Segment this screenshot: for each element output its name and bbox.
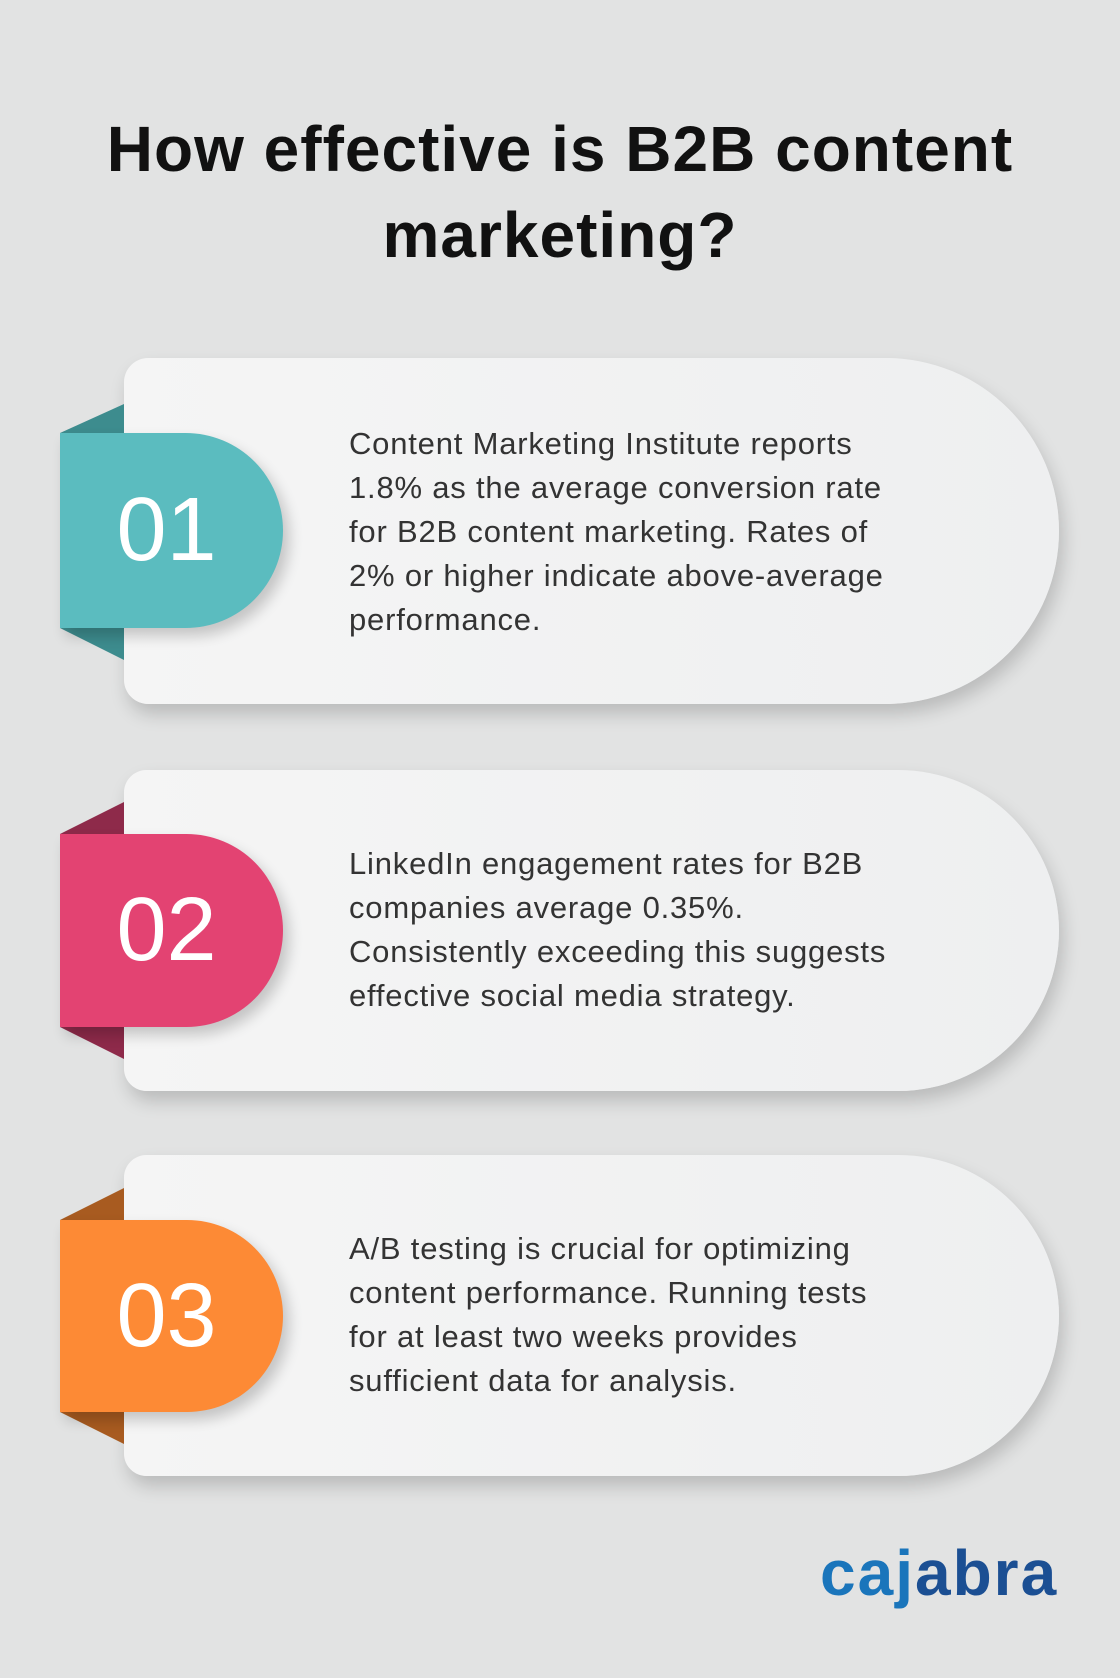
text 01: 1.8% as the average conversion rate	[349, 470, 882, 505]
text 02	[349, 846, 886, 1013]
text 03: content performance. Running tests	[349, 1275, 867, 1310]
text 01: for B2B content marketing. Rates of	[349, 514, 868, 549]
badge 01	[60, 433, 283, 628]
text 01: 2% or higher indicate above-average	[349, 558, 884, 593]
fold top 03	[60, 1188, 124, 1220]
card 01	[124, 358, 1059, 704]
panel: item 01	[60, 358, 1070, 721]
badge 03: 03	[116, 1266, 217, 1366]
text 02: Consistently exceeding this suggests	[349, 934, 886, 969]
fold bottom 02	[60, 1027, 124, 1059]
badge 02: 02	[116, 880, 217, 980]
panel: item 02	[60, 770, 1070, 1108]
text 03	[349, 1231, 867, 1398]
badge 01: 01	[116, 480, 217, 580]
text 03: sufficient data for analysis.	[349, 1363, 737, 1398]
fold bottom 03	[60, 1412, 124, 1444]
badge 02	[60, 834, 283, 1027]
fold top 01	[60, 404, 124, 433]
text 02: companies average 0.35%.	[349, 890, 744, 925]
text 03: for at least two weeks provides	[349, 1319, 798, 1354]
text 02: effective social media strategy.	[349, 978, 796, 1013]
badge 03	[60, 1220, 283, 1412]
title: marketing?	[383, 199, 737, 271]
text 03: A/B testing is crucial for optimizing	[349, 1231, 851, 1266]
text 01: performance.	[349, 602, 541, 637]
title	[107, 113, 1013, 271]
card 02	[124, 770, 1059, 1091]
text 01	[349, 426, 884, 637]
card 03	[124, 1155, 1059, 1476]
logo: cajabra: cajabra	[820, 1537, 1058, 1609]
text 02: LinkedIn engagement rates for B2B	[349, 846, 863, 881]
title: How effective is B2B content	[107, 113, 1013, 185]
fold top 02	[60, 802, 124, 834]
fold bottom 01	[60, 628, 124, 660]
text 01: Content Marketing Institute reports	[349, 426, 853, 461]
